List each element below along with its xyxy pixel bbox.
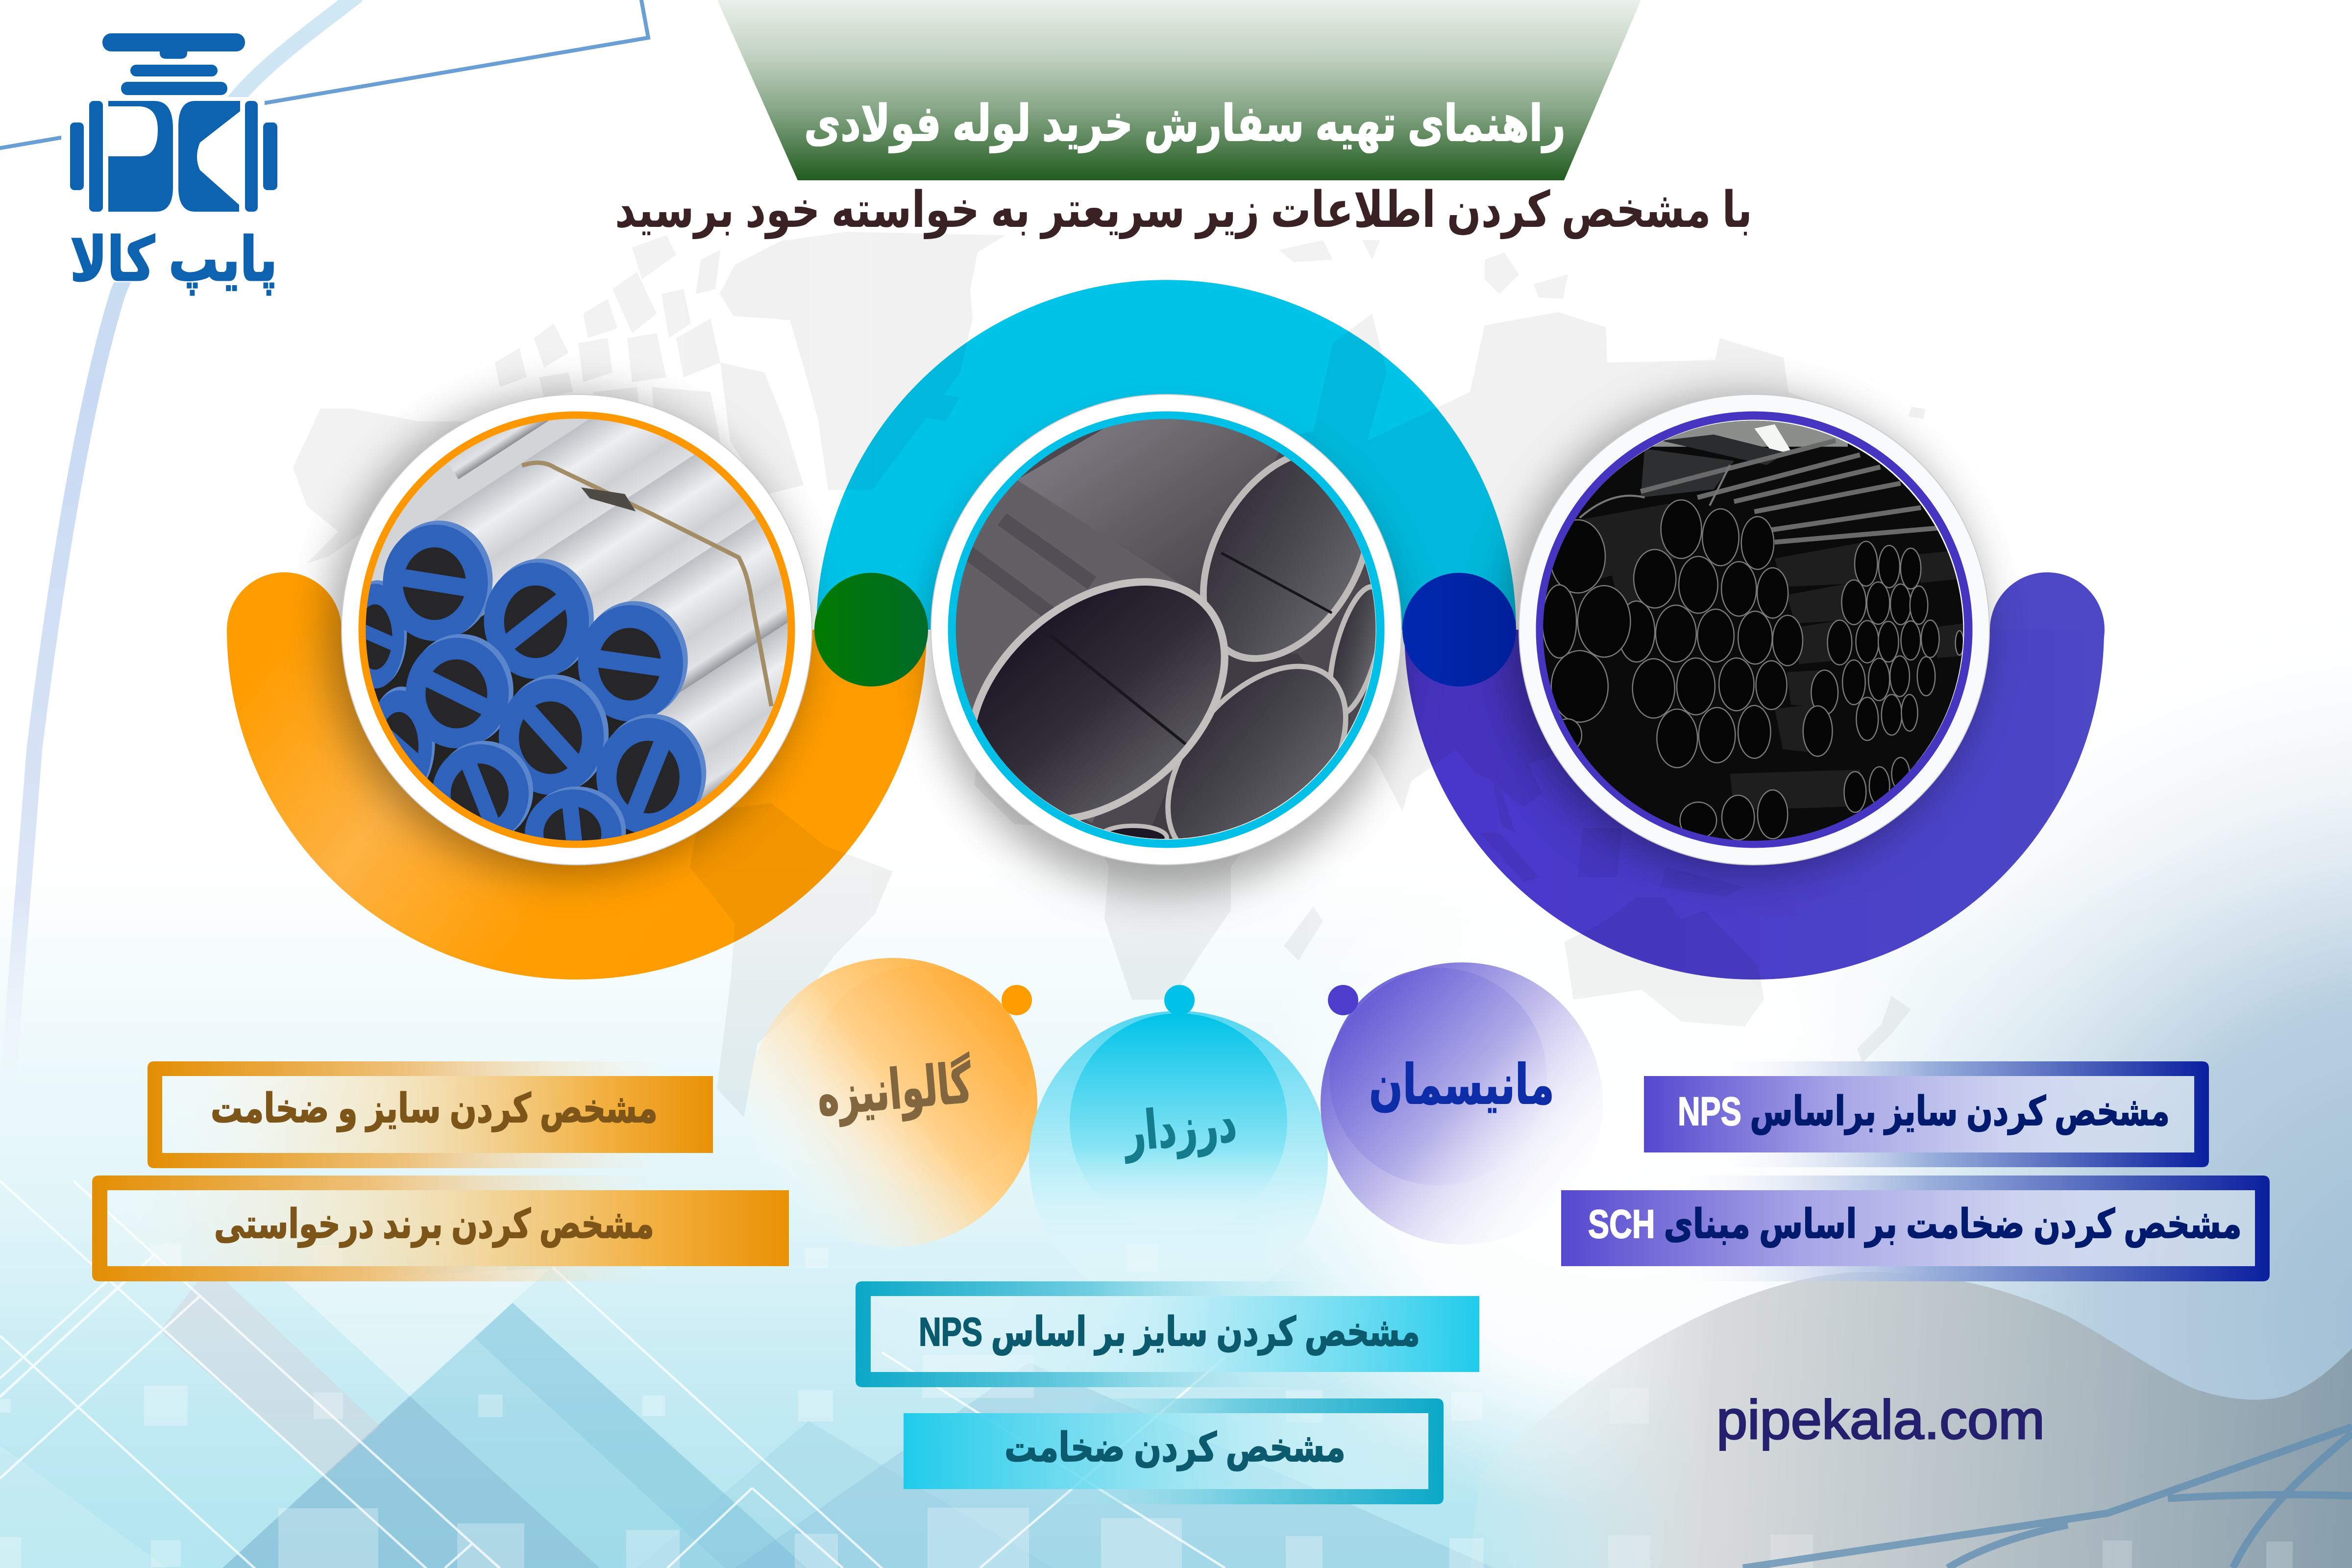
bubble: galvanized [748, 958, 1037, 1247]
subtitle: با مشخص کردن اطلاعات زیر سریعتر به خواسته خود برسید [615, 182, 1752, 239]
bubble: seamless: مانیسمان [1369, 1054, 1554, 1115]
bubble: seamless [1321, 962, 1603, 1245]
panel: welded thickness: مشخص کردن ضخامت [1004, 1425, 1346, 1471]
panel: welded pipe photo [924, 394, 1405, 892]
panel: seamless pipe photo [1519, 394, 1989, 865]
connector circle: blue [1402, 573, 1516, 686]
title banner [717, 0, 1641, 180]
panel: galvanized size [147, 1061, 713, 1168]
bubble: welded: درزدار [1120, 1093, 1239, 1163]
curved arcs [227, 337, 2105, 922]
panel: seamless size: مشخص کردن سایز براساس NPS [1678, 1089, 2170, 1135]
title: راهنمای تهیه سفارش خرید لوله فولادی [804, 96, 1566, 153]
icon: pipekala logo [70, 33, 277, 295]
panel: seamless size [1644, 1061, 2209, 1167]
panel: galvanized brand: مشخص کردن برند درخواستی [214, 1202, 654, 1248]
shadows under photo circles [327, 394, 1984, 892]
panel: galvanized size: مشخص کردن سایز و ضخامت [211, 1086, 658, 1132]
panel: galvanized brand [92, 1176, 789, 1281]
panel: galvanized photo [335, 187, 1100, 888]
icon: pipekala logo: پایپ کالا [70, 226, 277, 295]
panel: welded thickness [904, 1398, 1444, 1504]
website url: pipekala.com [1716, 1389, 2045, 1450]
decorative top-left line frame [0, 0, 648, 1102]
panel: welded size: مشخص کردن سایز بر اساس NPS [919, 1310, 1420, 1355]
world map backdrop [293, 232, 1926, 1117]
panel: seamless thickness [1561, 1176, 2270, 1281]
connector circle: green [814, 573, 928, 686]
panel: welded size [856, 1281, 1479, 1387]
bubble: galvanized: گالوانیزه [815, 1052, 975, 1128]
bubble: welded [1029, 985, 1328, 1310]
